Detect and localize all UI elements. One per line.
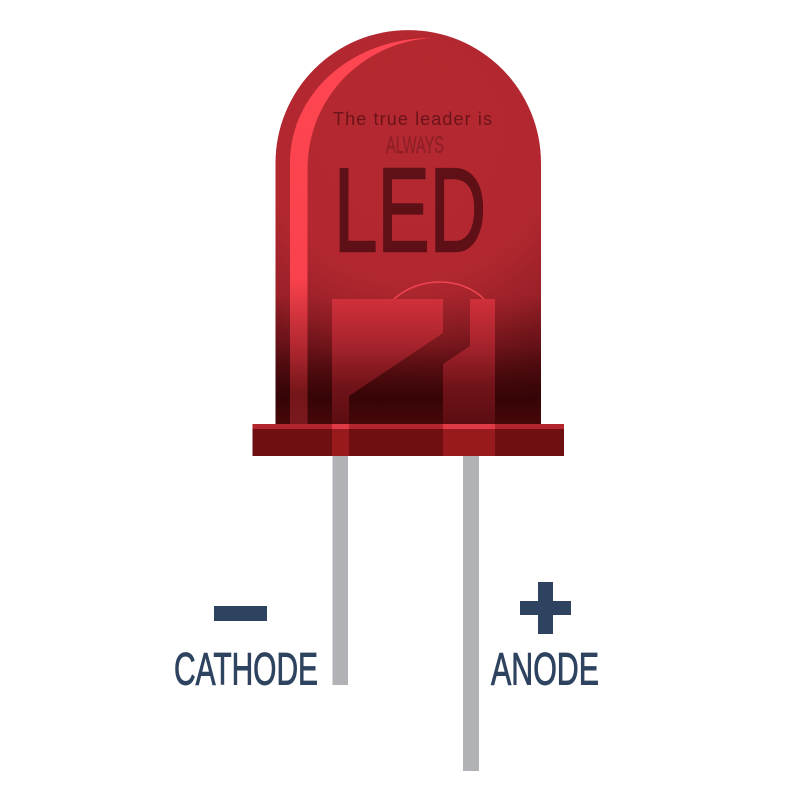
cathode frame [332, 299, 443, 424]
LED text: LED [334, 144, 486, 277]
tagline text: The true leader is [333, 109, 492, 129]
icon: plus [520, 582, 571, 634]
LED base flange [252, 424, 564, 456]
icon: minus [214, 606, 267, 621]
LED dome [276, 30, 541, 424]
lead: cathode [332, 450, 348, 685]
always text: ALWAYS [386, 132, 444, 159]
lead: anode [463, 450, 479, 771]
bond wire [393, 282, 485, 300]
label: cathode: CATHODE [174, 644, 318, 694]
anode frame [443, 299, 495, 424]
label: anode: ANODE [491, 644, 599, 694]
dome highlight [290, 38, 432, 424]
